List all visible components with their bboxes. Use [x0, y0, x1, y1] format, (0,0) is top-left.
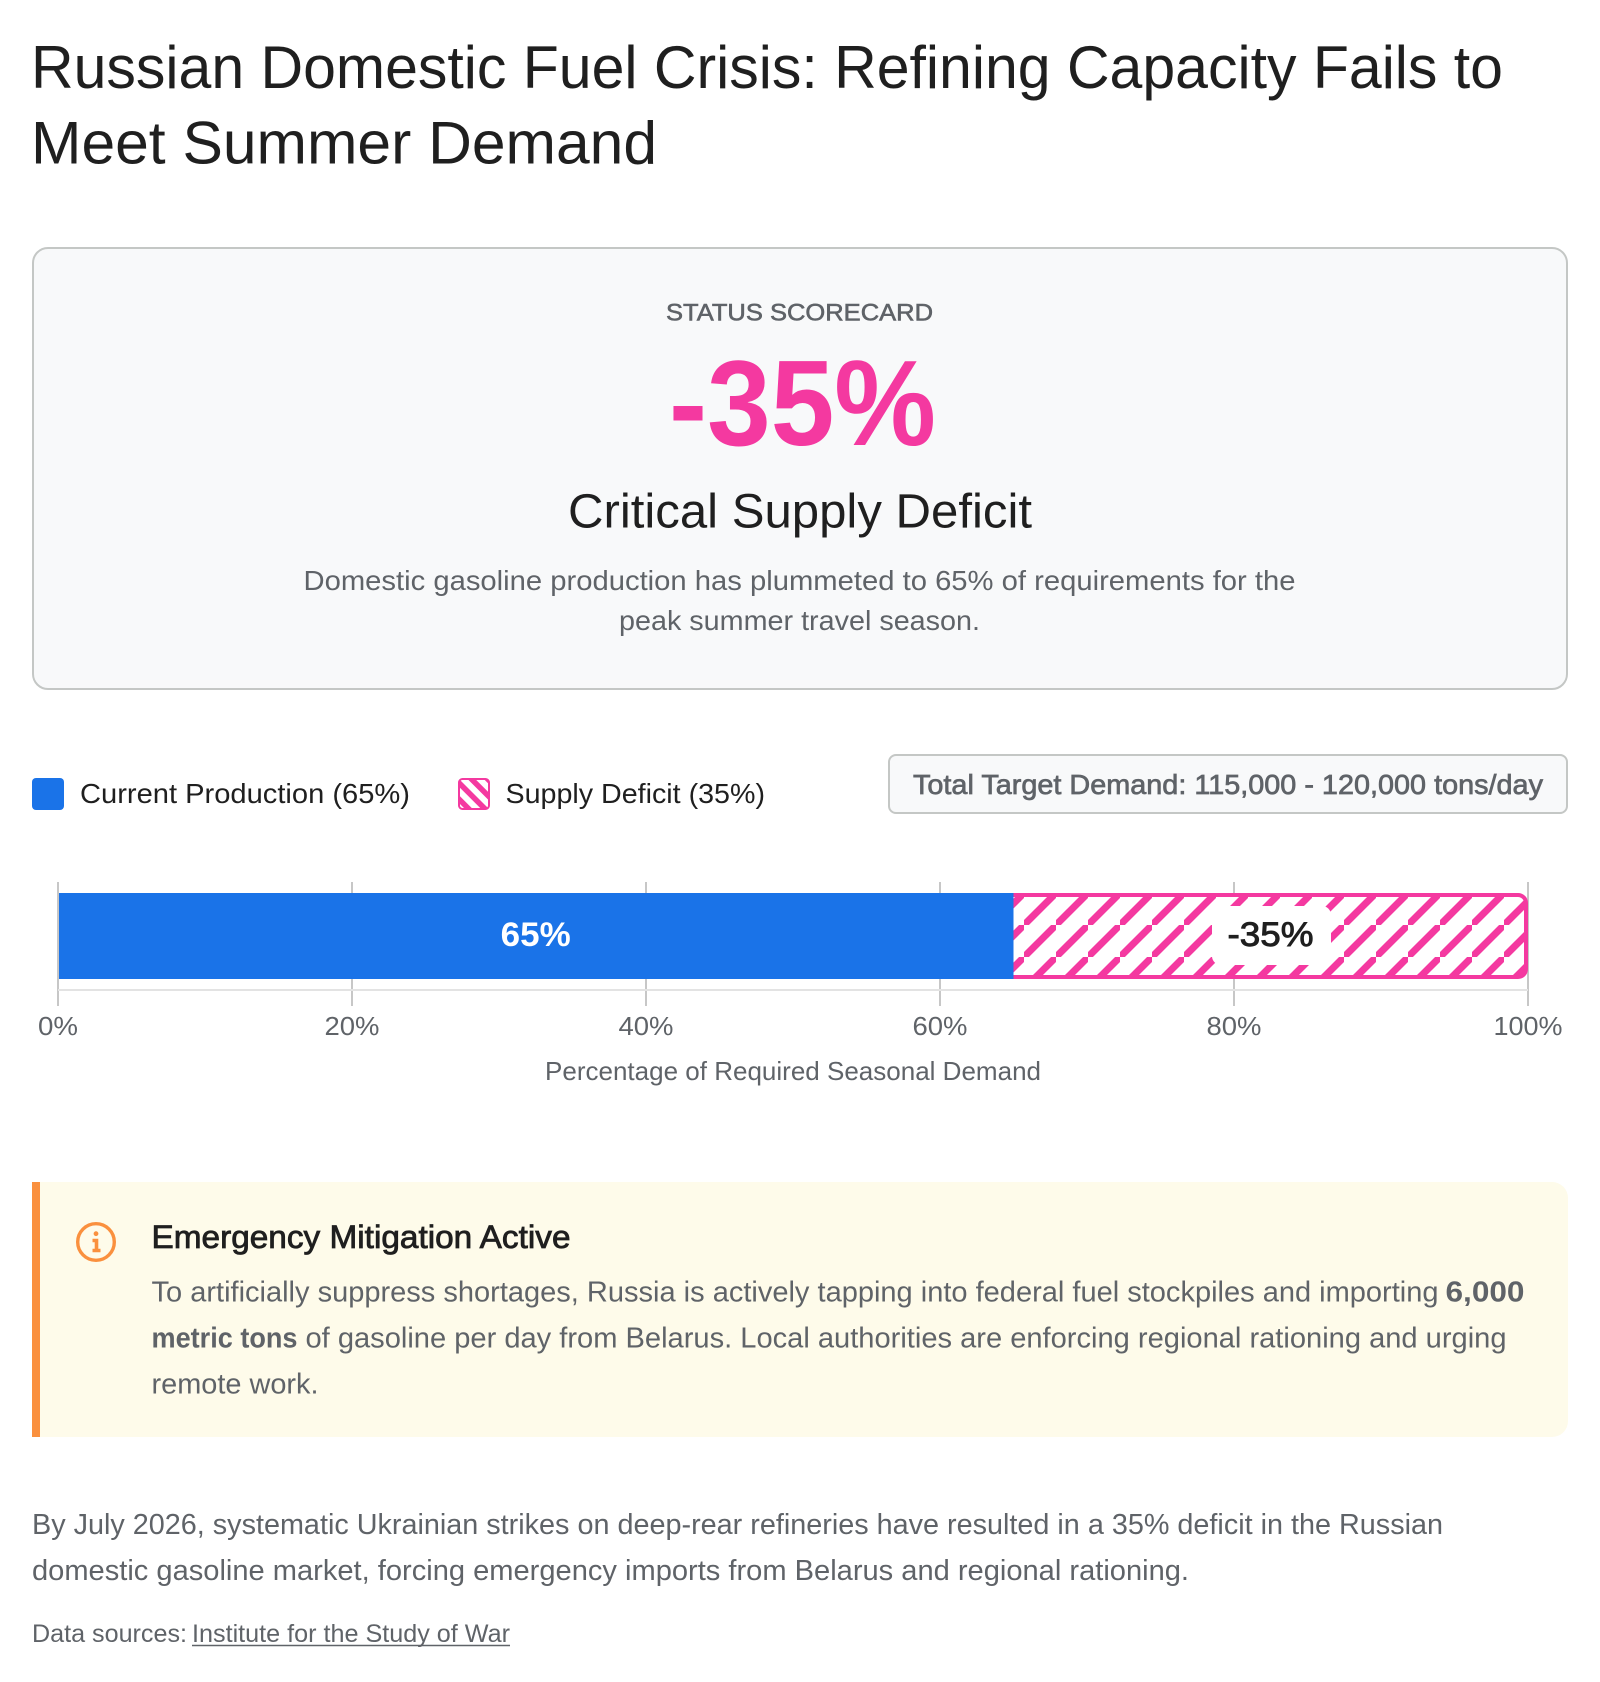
- big number: -35%: -35%: [669, 335, 936, 471]
- bar: current production 65%: [59, 893, 1014, 979]
- scorecard headline: Critical Supply Deficit: [568, 486, 1032, 538]
- bar: supply deficit 35%: -35%: [1228, 916, 1314, 954]
- x axis tick labels: 80%: [1206, 1011, 1262, 1041]
- legend swatch: supply deficit: [459, 779, 489, 809]
- x axis tick labels: 100%: [1494, 1011, 1562, 1041]
- scorecard description: peak summer travel season.: [619, 605, 980, 636]
- axis gridlines and ticks: [58, 882, 1528, 1006]
- scorecard description: [304, 565, 1296, 636]
- summary paragraph: [32, 1509, 1443, 1587]
- x axis tick labels: 0%: [38, 1011, 78, 1041]
- callout body text: To artificially suppress shortages, Russia is actively tapping into federal fuel stockpiles and importing: [152, 1276, 1438, 1308]
- badge: total target demand: Total Target Demand: 115,000 - 120,000 tons/day: [913, 769, 1543, 800]
- callout body text: remote work.: [152, 1368, 318, 1400]
- callout: emergency mitigation: [32, 1182, 1568, 1437]
- callout body text: 6,000: [1446, 1276, 1524, 1308]
- x axis tick labels: [38, 1011, 1562, 1041]
- legend label: current production: Current Production (65%): [80, 778, 410, 809]
- bar chart: production vs deficit: [38, 882, 1562, 1086]
- summary paragraph: By July 2026, systematic Ukrainian strikes on deep-rear refineries have resulted in a 35% deficit in the Russian: [32, 1509, 1443, 1541]
- callout body text: metric tons: [152, 1322, 298, 1354]
- legend: [32, 778, 765, 810]
- x axis tick labels: 60%: [912, 1011, 968, 1041]
- title: Meet Summer Demand: [31, 110, 657, 176]
- title: [31, 34, 1503, 176]
- panel: status scorecard: [33, 248, 1567, 689]
- title: Russian Domestic Fuel Crisis: Refining Capacity Fails to: [31, 34, 1503, 101]
- scorecard description: Domestic gasoline production has plummeted to 65% of requirements for the: [304, 565, 1296, 596]
- callout body text: [152, 1276, 1524, 1400]
- data sources: Data sources:: [32, 1620, 187, 1648]
- icon: info circle: [78, 1224, 114, 1260]
- x axis tick labels: 20%: [324, 1011, 380, 1041]
- legend label: supply deficit: Supply Deficit (35%): [506, 778, 765, 809]
- badge: total target demand: [889, 755, 1567, 813]
- x axis title: Percentage of Required Seasonal Demand: [545, 1056, 1041, 1086]
- data sources: Institute for the Study of War: [192, 1620, 510, 1648]
- data sources: [32, 1620, 510, 1648]
- callout body text: of gasoline per day from Belarus. Local authorities are enforcing regional rationing and urging: [306, 1322, 1506, 1354]
- callout heading: Emergency Mitigation Active: [152, 1219, 570, 1255]
- summary paragraph: domestic gasoline market, forcing emergency imports from Belarus and regional rationing.: [32, 1555, 1189, 1587]
- scorecard label: STATUS SCORECARD: [666, 300, 933, 326]
- bar: supply deficit 35%: [1014, 895, 1526, 977]
- bar: current production 65%: 65%: [501, 916, 571, 954]
- x axis tick labels: 40%: [618, 1011, 674, 1041]
- legend swatch: current production: [32, 778, 64, 810]
